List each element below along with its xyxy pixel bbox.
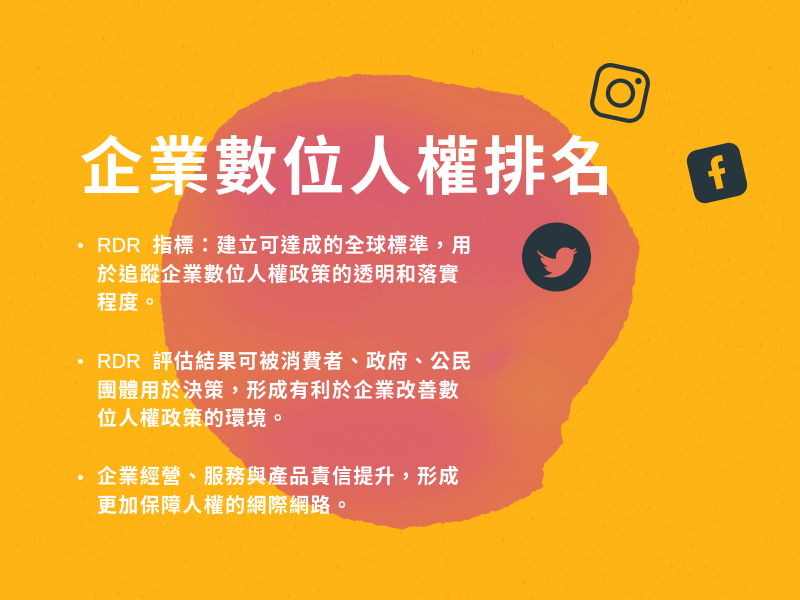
text: 位人權政策的環境。 xyxy=(97,408,289,430)
icon: twitter xyxy=(522,222,591,292)
text: 團體用於決策，形成有利於企業改善數 xyxy=(97,380,460,402)
text: 更加保障人權的網際網路。 xyxy=(97,495,353,517)
bullet: corporate accountability xyxy=(78,466,460,517)
bullet: RDR results xyxy=(78,350,473,430)
icon: facebook xyxy=(686,142,748,204)
text: 企業經營、服務與產品責信提升，形成 xyxy=(97,466,460,488)
title: 企業數位人權排名 xyxy=(80,133,618,203)
text: 程度。 xyxy=(97,292,161,314)
text: RDR 指標：建立可達成的全球標準，用 xyxy=(97,235,473,257)
text: 於追蹤企業數位人權政策的透明和落實 xyxy=(97,264,460,286)
text: RDR 評估結果可被消費者、政府、公民 xyxy=(97,351,473,373)
icon: instagram xyxy=(590,63,650,123)
bullet: RDR indicators xyxy=(78,234,473,314)
